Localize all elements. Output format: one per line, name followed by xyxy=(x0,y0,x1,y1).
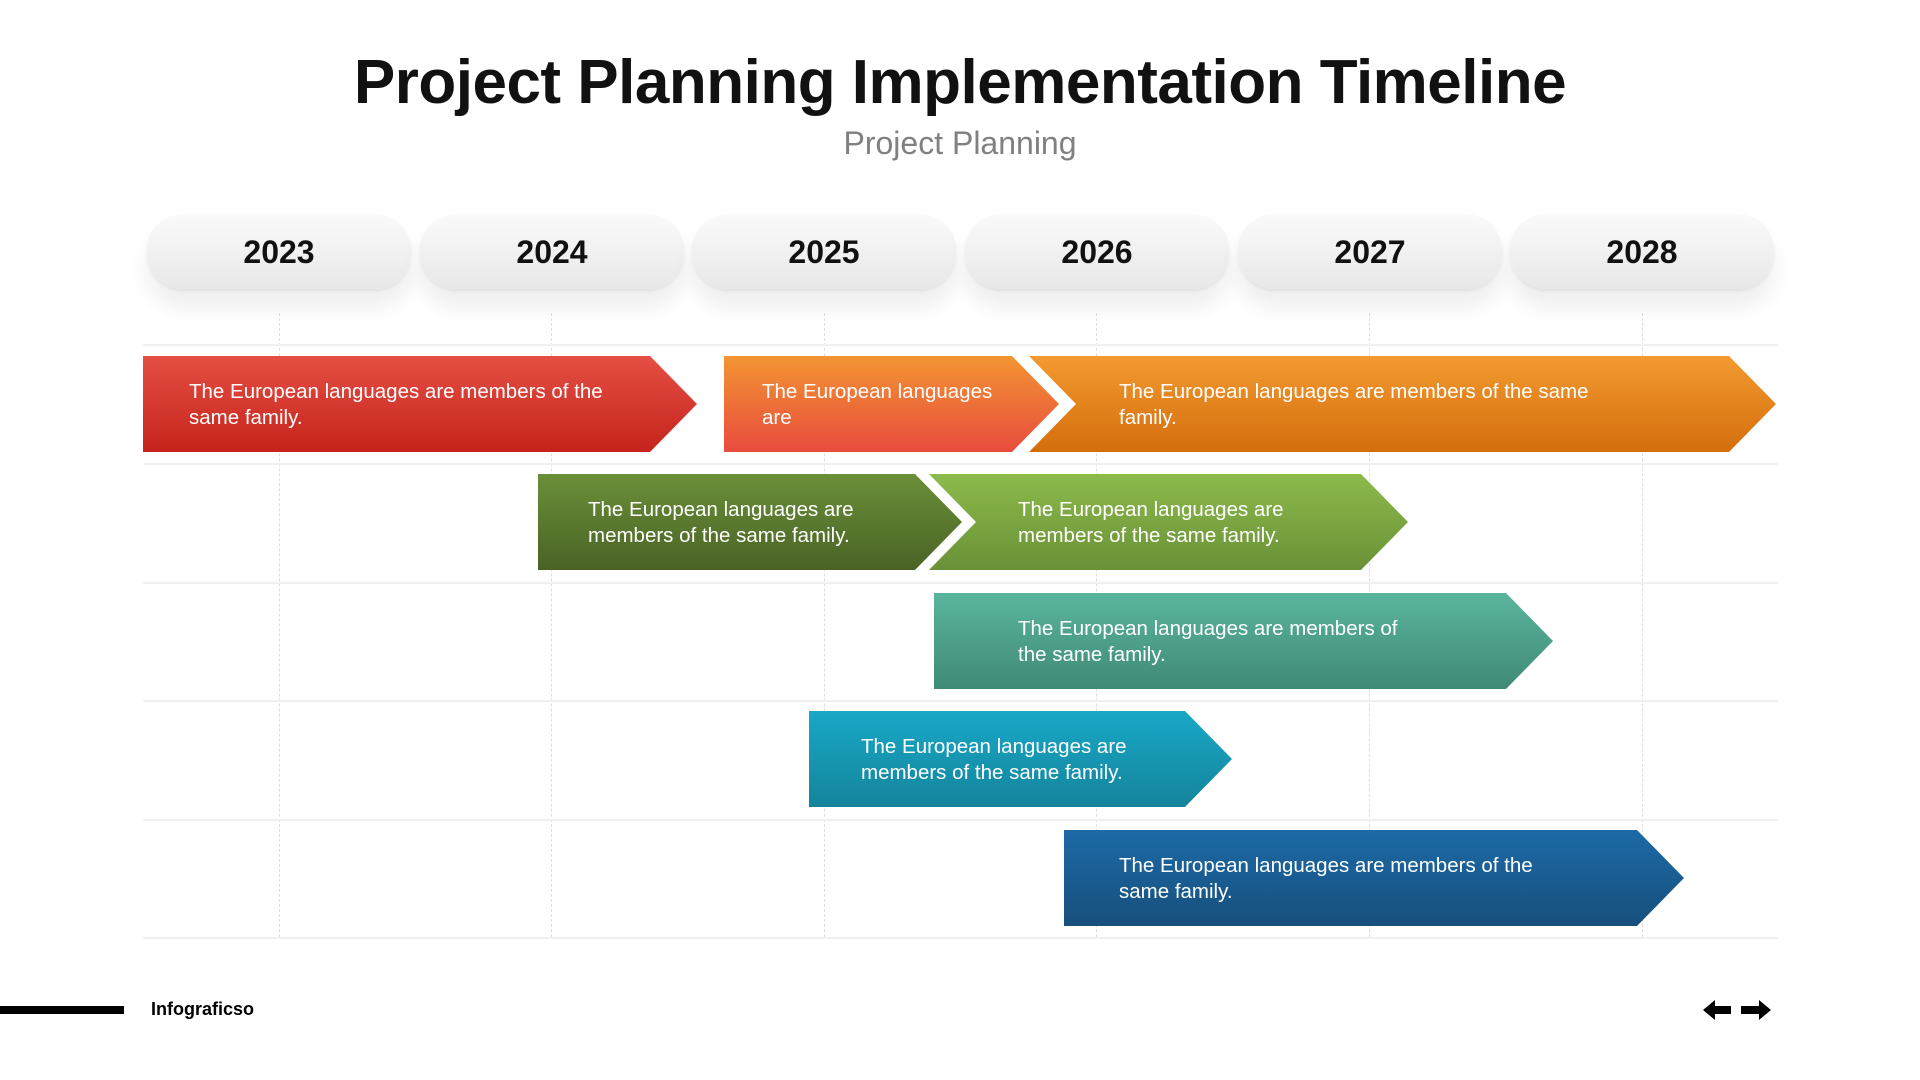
year pill: 2024: 2024 xyxy=(516,234,588,270)
arrow: teal row 3: the same family. xyxy=(1018,643,1166,666)
arrow: cyan row 4: members of the same family. xyxy=(861,761,1123,784)
year pill: 2027 xyxy=(1238,214,1502,289)
arrow: teal row 3: The European languages are members of xyxy=(1018,617,1397,640)
year pill: 2028: 2028 xyxy=(1606,234,1678,270)
icon: nav arrows xyxy=(1703,1000,1771,1020)
subtitle: Project Planning xyxy=(843,125,1077,161)
arrow: teal row 3 xyxy=(934,593,1553,689)
year pill: 2026: 2026 xyxy=(1061,234,1133,270)
year pill: 2025 xyxy=(692,214,956,289)
arrow: red row 1: The European languages are members of the xyxy=(189,380,603,403)
year pill: 2028 xyxy=(1510,214,1774,289)
year pill: 2025: 2025 xyxy=(788,234,860,270)
arrow: orange row 1 long xyxy=(1029,356,1776,452)
arrow: light green row 2: members of the same family. xyxy=(1018,524,1280,547)
title: Project Planning Implementation Timeline xyxy=(354,48,1566,117)
year pill: 2023 xyxy=(147,214,411,289)
year pill: 2027: 2027 xyxy=(1334,234,1406,270)
arrow: blue row 5: The European languages are members of the xyxy=(1119,854,1533,877)
arrow: blue row 5: same family. xyxy=(1119,880,1233,903)
footer brand: Infograficso xyxy=(151,999,254,1019)
year pill: 2023: 2023 xyxy=(243,234,315,270)
arrow: dark green row 2 xyxy=(538,474,962,570)
arrow: light green row 2 xyxy=(929,474,1408,570)
arrow: red row 1: same family. xyxy=(189,406,303,429)
arrow: orange row 1 short: The European languages xyxy=(762,380,992,403)
arrow: cyan row 4 xyxy=(809,711,1232,807)
arrow: orange row 1 short: are xyxy=(762,406,792,429)
year pill: 2026 xyxy=(965,214,1229,289)
year pill: 2024 xyxy=(420,214,684,289)
arrow: orange row 1 short xyxy=(724,356,1059,452)
footer bar xyxy=(0,1006,124,1014)
arrow: red row 1 xyxy=(143,356,697,452)
arrow: dark green row 2: The European languages are xyxy=(588,498,854,521)
arrow: light green row 2: The European languages are xyxy=(1018,498,1284,521)
arrow: cyan row 4: The European languages are xyxy=(861,735,1127,758)
arrow: orange row 1 long: The European languages are members of the same xyxy=(1119,380,1588,403)
arrow: dark green row 2: members of the same family. xyxy=(588,524,850,547)
arrow: orange row 1 long: family. xyxy=(1119,406,1177,429)
arrow: blue row 5 xyxy=(1064,830,1684,926)
